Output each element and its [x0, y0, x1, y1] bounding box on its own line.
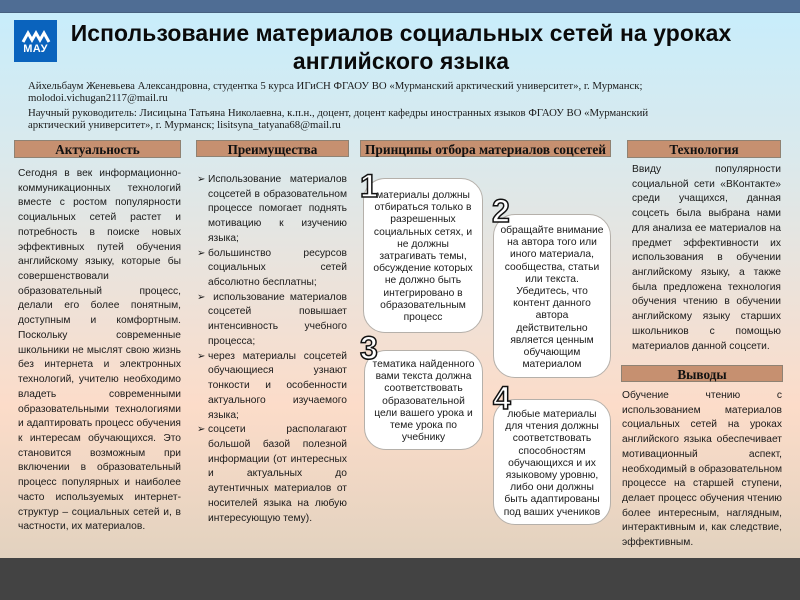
card 2: действительно [516, 323, 588, 334]
text: relevance: Сегодня в век информационно- [18, 168, 181, 179]
text: conclusions: английского языка обеспечивает [622, 434, 782, 445]
text: advantages list: большой базой полезной [208, 439, 347, 450]
text: technology: соцсеть была выбрана нами [632, 208, 781, 219]
title: английского языка [293, 48, 509, 74]
heading: relevance: Актуальность [55, 142, 140, 157]
text: technology: английскому языку старших [632, 311, 781, 322]
number 4: 4 [493, 380, 511, 416]
text: relevance: и адаптировать процесс обучения [18, 418, 181, 429]
text: relevance: эффективных путей обучения [18, 242, 181, 253]
text: advantages list: абсолютно бесплатны; [208, 277, 317, 288]
top bar [0, 0, 800, 13]
heading: relevance [14, 140, 181, 158]
card 3: образовательной [382, 396, 465, 407]
text: conclusions: эффективным. [622, 537, 693, 548]
text: technology: использования в обучении [632, 252, 781, 263]
heading: technology [627, 140, 781, 158]
text: technology: материалов данной соцсети. [632, 341, 770, 352]
text: technology: Ввиду популярности [632, 164, 781, 175]
heading: advantages: Преимущества [228, 142, 317, 157]
text: relevance: доступным и комфортным. [18, 315, 181, 326]
text: advantages list: Использование материалов [208, 174, 347, 185]
text: technology: была предложена технология [632, 282, 781, 293]
text: relevance: коммуникационных технологий [18, 183, 181, 194]
text: relevance: часто используемых интернет- [18, 492, 181, 503]
text: advantages list: процесса; [208, 336, 255, 347]
logo: МАУ [23, 43, 48, 55]
text: advantages list: соцсети располагают [208, 424, 347, 435]
text: relevance: социальных сетей растет и [18, 212, 181, 223]
text: technology: среди учащихся, данная [632, 193, 781, 204]
text: relevance: делали его более понятным, [18, 300, 181, 311]
text: relevance: включении в образовательный [18, 462, 181, 473]
card 1: обсуждение которых [373, 263, 473, 274]
number 1: 1 [360, 168, 378, 204]
text: conclusions: необходимый в образовательном [622, 464, 782, 475]
number 2: 2 [492, 193, 510, 229]
text: advantages list: социальных сетей [208, 262, 347, 273]
text: relevance: технологий, учителю необходимо [18, 374, 181, 385]
text: relevance: потребность в поиске новых [18, 227, 181, 238]
card 4: быть адаптированы [504, 494, 600, 505]
text: advantages list: информации (от интересных [208, 454, 347, 465]
text: advantages list: языка; [208, 410, 239, 420]
text: advantages list: языка; [208, 233, 239, 244]
heading: conclusions: Выводы [677, 367, 727, 382]
card 2: сообщества, статьи [505, 262, 599, 273]
text: advantages list: мотивацию к изучению [208, 218, 347, 229]
card 1: процесс [404, 312, 442, 323]
text: technology: предмет эффективности их [632, 238, 781, 249]
text: conclusions [622, 390, 782, 548]
text: technology: обучения чтению в обучении [632, 296, 781, 307]
text: advantages list: через материалы соцсетей [208, 351, 347, 362]
supervisor [28, 107, 648, 131]
text: relevance: школьники не мыслят свою жизнь [18, 345, 181, 356]
card 1: не должны [397, 239, 449, 250]
text: advantages list: соцсетей в образовательном [208, 189, 347, 200]
card 4: языковому уровню, [506, 470, 598, 481]
card 2 [493, 214, 611, 378]
card 2: Убедитесь, что [516, 286, 588, 297]
text: advantages list: интересующую тему). [208, 513, 312, 524]
card 1: материалы должны [376, 190, 470, 201]
heading: advantages [196, 140, 349, 157]
text: advantages list: использование материалов [213, 292, 347, 303]
card 4: способностям [518, 446, 586, 457]
card 4: обучающихся и их [508, 458, 596, 469]
card 2: контент данного [513, 298, 591, 309]
text: advantages list: процессе помогает поднять [208, 203, 347, 214]
text: advantages list: интенсивность учебного [208, 321, 347, 332]
text: relevance: вместе с ростом популярности [18, 197, 181, 208]
card 1: затрагивать темы, [379, 251, 467, 262]
text: relevance: частности, их материалов. [18, 521, 145, 532]
text: conclusions: более интересным, наглядным, [622, 508, 782, 519]
card 2: автора [536, 310, 568, 321]
card 1 [363, 178, 483, 333]
card 2: обучающим [524, 347, 580, 358]
text: technology [632, 164, 781, 352]
number 3: 3 [360, 330, 378, 366]
card 2: на автора того или [507, 237, 597, 248]
card 1: разрешенных [390, 214, 456, 225]
authors: Айхельбаум Женевьева Александровна, студентка 5 курса ИГиСН ФГАОУ ВО «Мурманский арктический университет», г. Мурманск; [28, 80, 643, 92]
title: Использование материалов социальных сетей на уроках [71, 20, 731, 46]
text: relevance: совершенствовали [18, 271, 109, 282]
card 3: вами текста должна [376, 371, 471, 382]
text: conclusions: мотивационный аспект, [622, 449, 782, 460]
card 4: либо они должны [510, 482, 594, 493]
text: conclusions: Обучение чтению с [622, 390, 782, 401]
text: advantages list: обучающиеся узнают [208, 365, 347, 376]
card 3: учебнику [402, 432, 445, 443]
text: advantages list: аутентичных материалов от [208, 483, 347, 494]
text: conclusions: использованием материалов [622, 405, 782, 416]
card 4: под ваших учеников [504, 507, 600, 518]
text: relevance: владеть современными [18, 389, 181, 400]
card 3: соответствовать [384, 383, 463, 394]
card 3: цели вашего урока и [374, 408, 473, 419]
text: conclusions: делает процесс обучения чтению [622, 493, 782, 504]
card 3: теме урока по [390, 420, 457, 431]
card 2: является ценным [510, 335, 594, 346]
card 4 [493, 399, 611, 525]
text: relevance: структур – социальных сетей и, в [18, 507, 181, 518]
text: advantages list: большинство ресурсов [208, 248, 347, 259]
card 3: тематика найденного [373, 359, 474, 370]
card 4: для чтения должны [505, 421, 599, 432]
card 1: не должно быть [385, 275, 461, 286]
heading: technology: Технология [669, 142, 739, 157]
text: advantages list: соцсетей повышает [208, 306, 347, 317]
heading: principles: Принципы отбора материалов соцсетей [365, 142, 606, 157]
text: relevance: к интересам обучающихся. Это [18, 433, 181, 444]
text: technology: для анализа ее материалов на [632, 223, 781, 234]
supervisor: Научный руководитель: Лисицына Татьяна Николаевна, к.п.н., доцент, доцент кафедры иностранных языков ФГАОУ ВО «Мурманский [28, 107, 648, 119]
card 1: социальных сетях, и [374, 227, 472, 238]
text: advantages list: тонкости и особенности [208, 380, 347, 391]
text: relevance: без интернета и электронных [18, 359, 181, 370]
card 2: материалом [522, 359, 582, 370]
text: relevance: английскому языку, которые бы [18, 256, 181, 267]
bottom bar [0, 558, 800, 600]
text: advantages list: и актуальных до [208, 468, 347, 479]
text: advantages list [198, 174, 347, 524]
card 2: обращайте внимание [500, 225, 604, 236]
card 1: отбираться только в [375, 202, 471, 213]
text: conclusions: интерактивным и, как следствие, [622, 522, 782, 533]
text: relevance [18, 168, 181, 532]
text: technology: школьников с помощью [632, 326, 781, 337]
authors [28, 80, 643, 104]
text: conclusions: процессе на старшей ступени, [622, 478, 782, 489]
card 3 [364, 350, 483, 450]
card 1: образовательным [380, 300, 466, 311]
text: relevance: становится возможным при [18, 448, 181, 459]
text: advantages list: носителей языка на любую [208, 498, 347, 509]
text: advantages list: актуального изучаемого [208, 395, 347, 406]
card 2: или текста. [525, 274, 579, 285]
text: relevance: образовательный процесс, [18, 286, 181, 297]
card 4: любые материалы [507, 409, 597, 420]
text: relevance: Поскольку современные [18, 330, 181, 341]
card 2: иного материала, [510, 249, 594, 260]
text: technology: социальной сети «ВКонтакте» [632, 179, 781, 190]
title [71, 20, 731, 74]
card 1: интегрировано в [383, 288, 463, 299]
text: conclusions: социальных сетей на уроках [622, 419, 782, 430]
supervisor: арктический университет», г. Мурманск; lisitsyna_tatyana68@mail.ru [28, 119, 341, 131]
logo [14, 20, 57, 62]
text: relevance: процесс популярных и наиболее [18, 477, 181, 488]
text: technology: английскому языку, а также [632, 267, 781, 278]
text: relevance: образовательными технологиями [18, 404, 181, 414]
heading: conclusions [621, 365, 783, 382]
card 4: соответствовать [513, 433, 591, 444]
authors: molodoi.vichugan2117@mail.ru [28, 92, 168, 104]
